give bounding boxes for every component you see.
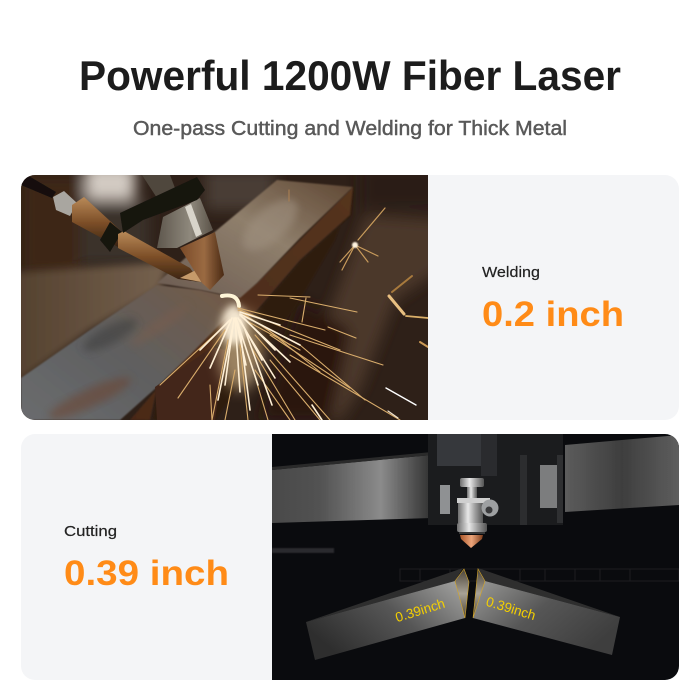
title: Powerful 1200W Fiber Laser [79,52,621,99]
steel beam rust face [21,285,236,420]
weld glow [218,310,262,390]
welding label: Welding [482,264,540,281]
beam front brown face [153,187,353,420]
steel beam top face [157,180,353,298]
cutting machine photo [272,434,679,680]
blurred backdrop [21,165,440,420]
cutting panel background [21,434,679,680]
right plate [478,568,620,617]
welding torch [21,175,224,290]
welding panel background [21,175,679,420]
gantry beams [272,455,432,523]
subtitle: One-pass Cutting and Welding for Thick Metal [133,118,567,140]
welding photo [15,165,440,425]
panel: welding [15,165,679,425]
sparks [160,190,428,420]
thickness labels: 0.39inch [394,596,447,625]
panel: cutting [21,434,679,680]
laser head [428,434,563,548]
welding value: 0.2 inch [482,295,624,334]
cutting value: 0.39 inch [64,554,229,593]
background rail [400,569,679,581]
cutting machine photo: 0.39inch [484,594,537,623]
cutting label: Cutting [64,523,117,540]
tan blurred band [15,262,170,385]
left plate [306,568,463,622]
cut faces [455,569,469,618]
